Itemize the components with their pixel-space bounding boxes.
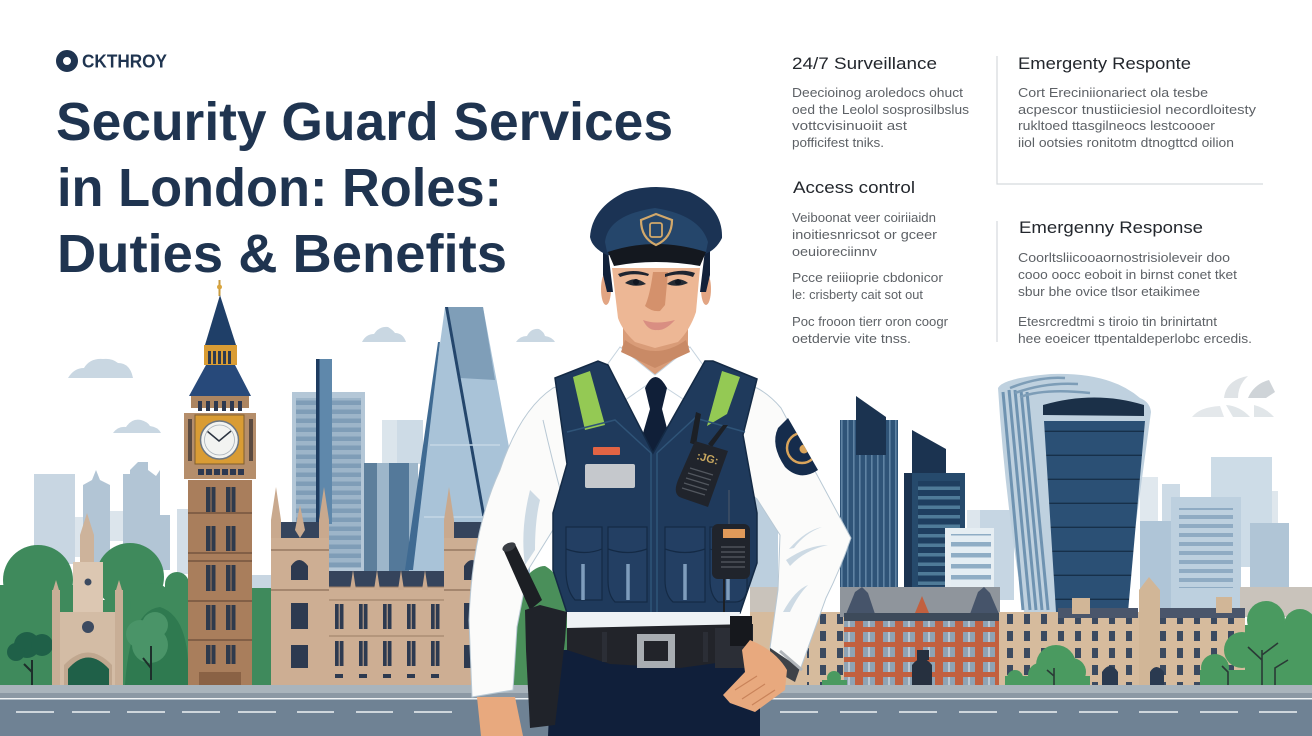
reflective strips — [573, 371, 605, 430]
bare tree branches — [1047, 643, 1288, 685]
trees right — [822, 601, 1312, 687]
trousers — [548, 650, 760, 736]
left arm sleeve — [469, 372, 610, 697]
belt — [567, 624, 753, 668]
panel: emergency response bottom: cooo oocc eoboit in birnst conet tket — [1018, 267, 1237, 282]
right arm sleeve — [700, 372, 851, 670]
panel: emergency response top: Cort Ereciniionariect ola tesbe — [1018, 85, 1208, 100]
skyline left background — [34, 420, 423, 615]
panel: access control: oeuioreciinnv — [792, 244, 878, 259]
radio upper: :JG: — [695, 450, 720, 468]
panel: access control: Poc frooon tierr oron coogr — [792, 314, 949, 329]
title: in London: Roles: — [57, 158, 502, 218]
panel: emergency response top: rukltoed ttasgilneocs lestcoooer — [1018, 118, 1216, 133]
parliament building — [271, 487, 504, 685]
pockets — [566, 527, 747, 602]
shard tower — [405, 307, 530, 600]
cap badge — [641, 214, 672, 245]
beige building right — [999, 577, 1245, 685]
big ben tower — [184, 280, 256, 685]
panel: emergency response top: Emergenty Responte — [1018, 54, 1191, 73]
green hill behind guard — [505, 566, 575, 685]
panel: 24/7 surveillance — [792, 54, 970, 150]
red brick building — [807, 587, 1000, 685]
name plate — [585, 464, 635, 488]
darker trees left — [7, 607, 188, 685]
wrist and watch — [770, 648, 800, 682]
panel: 24/7 surveillance: 24/7 Surveillance — [792, 54, 937, 73]
shoulder badge — [775, 418, 818, 475]
dark towers right — [840, 396, 994, 590]
panel: emergency response bottom: Etesrcredtmi s tiroio tin brinirtatnt — [1018, 314, 1217, 329]
panel: access control: oetdervie vite tnss. — [792, 331, 911, 346]
sleeve shading — [523, 490, 828, 612]
panel: emergency response top — [1018, 54, 1257, 150]
walkie talkie tower — [998, 374, 1151, 612]
road — [0, 685, 1312, 736]
trees left — [0, 543, 272, 685]
holster — [525, 605, 567, 728]
title: Security Guard Services — [56, 92, 673, 152]
panel: emergency response bottom: hee eoeicer ttpentaldeperlobc ercedis. — [1018, 331, 1252, 346]
panel: emergency response top: iiol ootsies ronitotm dtnogttcd oilion — [1018, 135, 1234, 150]
collar and shirt — [607, 347, 703, 405]
left hand — [477, 697, 523, 736]
skyline right background — [750, 430, 1312, 685]
right hand — [723, 640, 787, 712]
panel: access control: Pcce reiiioprie cbdonicor — [792, 270, 944, 285]
clouds — [68, 327, 555, 433]
radio upper — [676, 412, 728, 507]
baton — [503, 544, 542, 610]
tie — [641, 377, 670, 456]
vest — [553, 361, 757, 613]
panel: 24/7 surveillance: pofficifest tniks. — [792, 135, 884, 150]
title — [56, 92, 673, 284]
road dashes — [16, 711, 1297, 713]
neck — [612, 320, 700, 392]
panel: access control: le: crisberty cait sot out — [792, 287, 923, 302]
panel: emergency response bottom — [1018, 218, 1252, 346]
buckle — [637, 634, 675, 668]
panel: access control: inoitiesnricsot or gceer — [792, 227, 938, 242]
red tag — [593, 447, 620, 455]
panel: emergency response bottom: Coorltsliicooaornostrisioleveir doo — [1018, 250, 1230, 265]
radio lower — [712, 490, 750, 655]
shirt band at waist — [567, 612, 740, 630]
panel: emergency response bottom: Emergenny Response — [1019, 218, 1203, 237]
panel: access control: Access control — [793, 178, 915, 197]
panel: access control — [792, 178, 949, 346]
security guard — [469, 187, 851, 736]
panel: 24/7 surveillance: Deecioinog aroledocs ohuct — [792, 85, 963, 100]
vest seams — [567, 418, 745, 613]
panel: 24/7 surveillance: oed the Leolol sosprosilbslus — [792, 102, 970, 117]
belt keepers — [602, 628, 747, 668]
title: Duties & Benefits — [57, 224, 507, 284]
logo: CKTHROY — [82, 52, 167, 72]
office blocks — [364, 463, 418, 573]
cloud faded top right — [1192, 376, 1275, 417]
panel: 24/7 surveillance: vottcvisinuoiit ast — [792, 118, 907, 133]
panel: emergency response top: acpescor tnustiiciesiol necordloitesty — [1018, 102, 1257, 117]
gatehouse arch — [52, 513, 123, 685]
skyscraper striped — [292, 359, 365, 572]
panel: access control: Veiboonat veer coiriiaidn — [792, 210, 936, 225]
head — [601, 250, 711, 368]
cap — [590, 187, 722, 266]
panel: emergency response bottom: sbur bhe ovice tlsor etaikimee — [1018, 284, 1200, 299]
